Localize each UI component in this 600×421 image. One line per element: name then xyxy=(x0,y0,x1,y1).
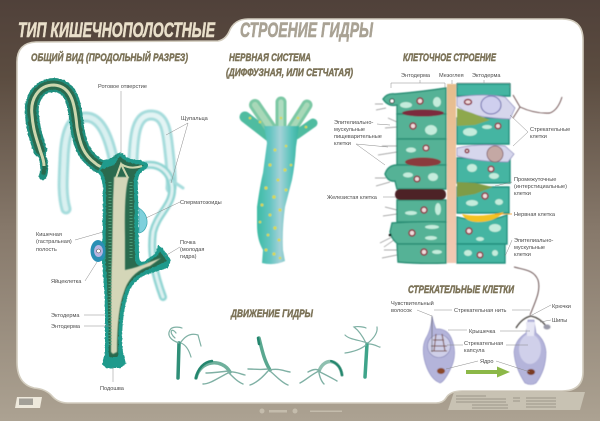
stage 2 xyxy=(196,361,245,384)
title: subtitle: СТРОЕНИЕ ГИДРЫ xyxy=(240,19,374,42)
nerve cell xyxy=(462,212,504,222)
labels: Крышечка xyxy=(469,329,496,335)
hydra movement sequence xyxy=(169,327,380,385)
heading: nervous system xyxy=(226,52,353,79)
green arrow xyxy=(466,366,510,378)
heading: stinging cells: СТРЕКАТЕЛЬНЫЕ КЛЕТКИ xyxy=(408,284,515,296)
labels: Стрекательная нить xyxy=(454,308,507,314)
labels: cell structure: мускульные xyxy=(334,127,365,133)
heading: hydra movement: ДВИЖЕНИЕ ГИДРЫ xyxy=(230,308,314,320)
label lines: general view xyxy=(75,91,188,382)
labels: cell structure: Эктодерма xyxy=(472,73,501,79)
spermatozoa gonad xyxy=(139,208,147,233)
labels: волосок xyxy=(391,308,412,314)
labels: general view xyxy=(36,84,222,392)
labels: general view: гидра) xyxy=(180,254,197,260)
labels: Ядро xyxy=(480,359,494,365)
light background tentacles xyxy=(63,115,183,297)
stage 3 xyxy=(248,338,290,385)
endoderm column xyxy=(375,88,446,263)
stage 4 xyxy=(300,361,342,384)
labels: cell structure: мускульные xyxy=(514,245,545,251)
labels: general view: Почка xyxy=(180,240,196,246)
labels: капсула xyxy=(464,348,485,354)
nerve cell pointer xyxy=(495,213,512,215)
heading: cell structure: КЛЕТОЧНОЕ СТРОЕНИЕ xyxy=(403,52,496,64)
cell structure diagram xyxy=(375,84,562,263)
stinging cells diagram xyxy=(391,267,571,384)
labels: cell structure: Эпителиально- xyxy=(514,238,553,244)
gastric cavity xyxy=(111,177,161,354)
large dark tentacle xyxy=(32,85,120,176)
heading: general view: ОБЩИЙ ВИД (ПРОДОЛЬНЫЙ РАЗРЕЗ) xyxy=(31,51,188,64)
mesoglea xyxy=(447,84,456,263)
barcode xyxy=(15,397,42,408)
labels: Чувствительный xyxy=(391,300,434,307)
cnidocytes xyxy=(457,95,515,119)
title: main: ТИП КИШЕЧНОПОЛОСТНЫЕ xyxy=(18,19,216,42)
labels: general view: Ротовое отверстие xyxy=(98,84,147,90)
discharged cnidocyte xyxy=(514,267,550,384)
labels: cell structure: клетки xyxy=(514,252,531,258)
labels: cell structure xyxy=(327,73,570,258)
nerve cells xyxy=(249,117,307,259)
body xyxy=(257,126,299,264)
labels: general view: Эктодерма xyxy=(51,313,80,319)
flagella xyxy=(375,104,397,258)
labels: general view: (гастральная) xyxy=(36,239,72,245)
labels: general view: Подошва xyxy=(100,386,125,392)
labels xyxy=(391,300,571,365)
labels: Крючки xyxy=(552,304,571,310)
label lines: cell structure xyxy=(356,80,528,256)
labels: cell structure: Нервная клетка xyxy=(514,212,556,218)
vacuoles and nuclei xyxy=(400,102,412,108)
interstitial cells xyxy=(457,108,490,126)
longitudinal section of hydra xyxy=(32,85,183,368)
mottled endoderm texture xyxy=(110,182,131,345)
labels: cell structure: Энтодерма xyxy=(401,73,431,79)
labels: cell structure: пищеварительные xyxy=(334,134,382,140)
labels: general view: Щупальца xyxy=(181,116,209,122)
labels: cell structure: Промежуточные xyxy=(514,177,556,183)
tentacles xyxy=(245,102,313,138)
labels: general view: полость xyxy=(36,247,57,253)
labels: cell structure: (интерстициальные) xyxy=(514,184,567,190)
heading: nervous system: (ДИФФУЗНАЯ, ИЛИ СЕТЧАТАЯ) xyxy=(226,67,353,79)
labels: general view: Энтодерма xyxy=(51,324,81,330)
stage 5 xyxy=(345,327,380,377)
labels: general view: Сперматозоиды xyxy=(180,200,222,206)
cnidocyte at rest xyxy=(423,316,455,383)
labels: general view: Яйцеклетка xyxy=(51,278,82,285)
imprint box xyxy=(448,392,585,410)
labels: general view: (молодая xyxy=(180,247,204,253)
label lines xyxy=(417,305,551,372)
ectoderm column xyxy=(457,84,562,263)
labels: Стрекательная xyxy=(464,341,503,347)
body wall xyxy=(98,152,171,368)
heading: nervous system: НЕРВНАЯ СИСТЕМА xyxy=(229,52,311,64)
labels: cell structure: Стрекательные xyxy=(530,127,570,133)
labels: cell structure: Мезоглея xyxy=(439,73,464,79)
labels: general view: Кишечная xyxy=(36,232,62,238)
labels: cell structure: Эпителиально- xyxy=(334,120,373,126)
nuclei and vacuoles xyxy=(463,128,477,136)
stage 1 xyxy=(169,327,201,378)
cnidocyte thread xyxy=(513,95,562,118)
labels: cell structure: клетки xyxy=(514,191,531,197)
labels: cell structure: Железистая клетка xyxy=(327,195,378,201)
gland cells xyxy=(402,110,444,116)
labels: Шипы xyxy=(552,318,567,324)
labels: cell structure: клетки xyxy=(530,134,547,140)
egg cell xyxy=(90,240,106,262)
labels: cell structure: клетки xyxy=(334,141,351,147)
publisher logos xyxy=(260,408,342,414)
nervous system hydra xyxy=(245,102,313,264)
